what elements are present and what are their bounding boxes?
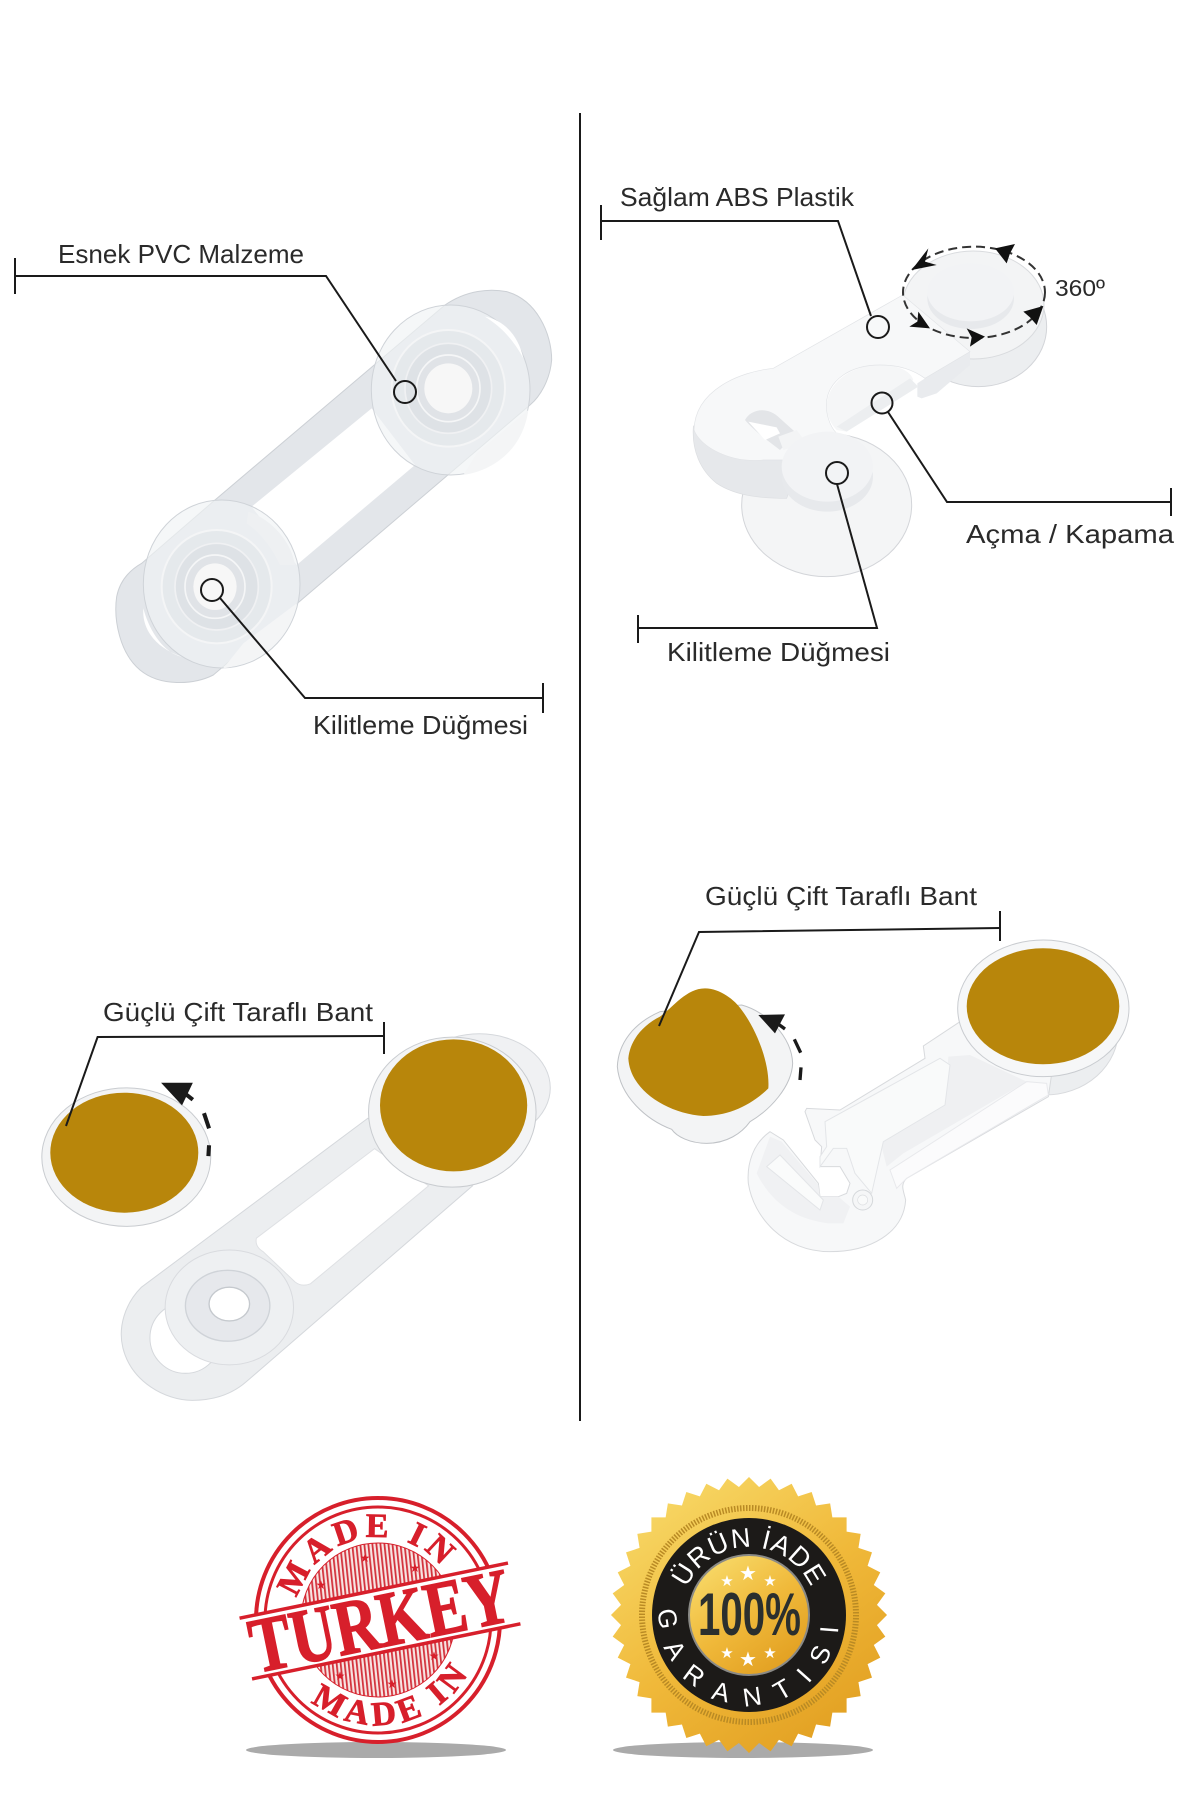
label: Açma / Kapama: Açma / Kapama — [966, 519, 1175, 549]
product photo: transparent strap with tape discs — [42, 1034, 550, 1400]
stamp red stars: ★ — [410, 1561, 420, 1575]
stamp red stars — [316, 1551, 439, 1691]
label: Kilitleme Düğmesi — [201, 579, 543, 740]
label: Güçlü Çift Taraflı Bant — [66, 997, 384, 1126]
left tape disc base — [617, 1005, 793, 1143]
seal black ring — [652, 1518, 846, 1712]
tape: right gold disc — [380, 1039, 527, 1171]
seal stars: ★ — [720, 1572, 734, 1590]
label: 360 degrees: 360º — [1055, 275, 1106, 301]
seal shadow — [613, 1742, 873, 1758]
seal inner gold — [689, 1555, 809, 1675]
seal stars: ★ — [739, 1561, 757, 1585]
stamp red stars: ★ — [316, 1578, 326, 1592]
seal text: GARANTISI: GARANTISI — [658, 1610, 838, 1707]
seal text: 100%: 100% — [698, 1581, 801, 1648]
stamp shadow — [246, 1742, 506, 1758]
label: Güçlü Çift Taraflı Bant: Güçlü Çift Taraflı Bant — [705, 881, 978, 911]
seal stars: ★ — [763, 1644, 777, 1662]
seal gold burst — [605, 1470, 893, 1760]
tape: peeled gold disc — [628, 988, 768, 1116]
panel: transparent lock front view — [15, 239, 552, 740]
product photo: transparent PVC strap — [116, 290, 552, 683]
label: Esnek PVC Malzeme: Esnek PVC Malzeme — [58, 239, 304, 269]
panel: white lock opened back view — [617, 881, 1129, 1252]
label: Güçlü Çift Taraflı Bant: Güçlü Çift Taraflı Bant — [103, 997, 374, 1027]
label: Esnek PVC Malzeme — [15, 239, 416, 403]
label: Kilitleme Düğmesi: Kilitleme Düğmesi — [313, 710, 528, 740]
label: Kilitleme Düğmesi — [638, 462, 890, 667]
tape: left gold disc — [50, 1093, 198, 1213]
seal stars: ★ — [739, 1647, 757, 1671]
tape: right gold disc — [967, 948, 1119, 1064]
label: Kilitleme Düğmesi: Kilitleme Düğmesi — [667, 637, 890, 667]
stamp red stars: ★ — [335, 1669, 345, 1683]
badge: 100% guarantee seal — [611, 1477, 887, 1758]
stamp red stars: ★ — [360, 1551, 370, 1565]
label: Açma / Kapama — [872, 392, 1175, 549]
stamp red stars: ★ — [429, 1649, 439, 1663]
seal engraved ring — [642, 1508, 856, 1722]
stamp rings — [256, 1498, 500, 1742]
icon: peel arrow — [758, 1014, 801, 1080]
badge: made in Turkey stamp — [239, 1496, 521, 1758]
vertical divider — [579, 113, 581, 1421]
icon: peel arrow — [161, 1083, 209, 1156]
label: Sağlam ABS Plastik — [601, 182, 889, 338]
seal stars — [720, 1561, 777, 1671]
panel: white lock closed view — [601, 182, 1175, 667]
stamp band: TURKEY: TURKEY — [242, 1551, 518, 1690]
stamp red stars: ★ — [387, 1677, 397, 1691]
label: Sağlam ABS Plastik: Sağlam ABS Plastik — [620, 182, 855, 212]
label: Güçlü Çift Taraflı Bant — [659, 881, 1000, 1026]
seal stars: ★ — [763, 1572, 777, 1590]
panel: transparent lock back view — [42, 997, 550, 1400]
seal stars: ★ — [720, 1644, 734, 1662]
seal text: ÜRÜN İADE: ÜRÜN İADE — [670, 1526, 826, 1586]
stamp text: MADE IN top: MADE IN — [276, 1514, 457, 1598]
product photo: opened white lock — [748, 940, 1129, 1252]
product photo: white ABS lock — [693, 251, 1047, 577]
stamp hatch centre — [301, 1543, 455, 1697]
stamp text: MADE IN bottom: MADE IN — [310, 1661, 467, 1726]
icon: 360 degree rotation arrows — [903, 244, 1045, 347]
